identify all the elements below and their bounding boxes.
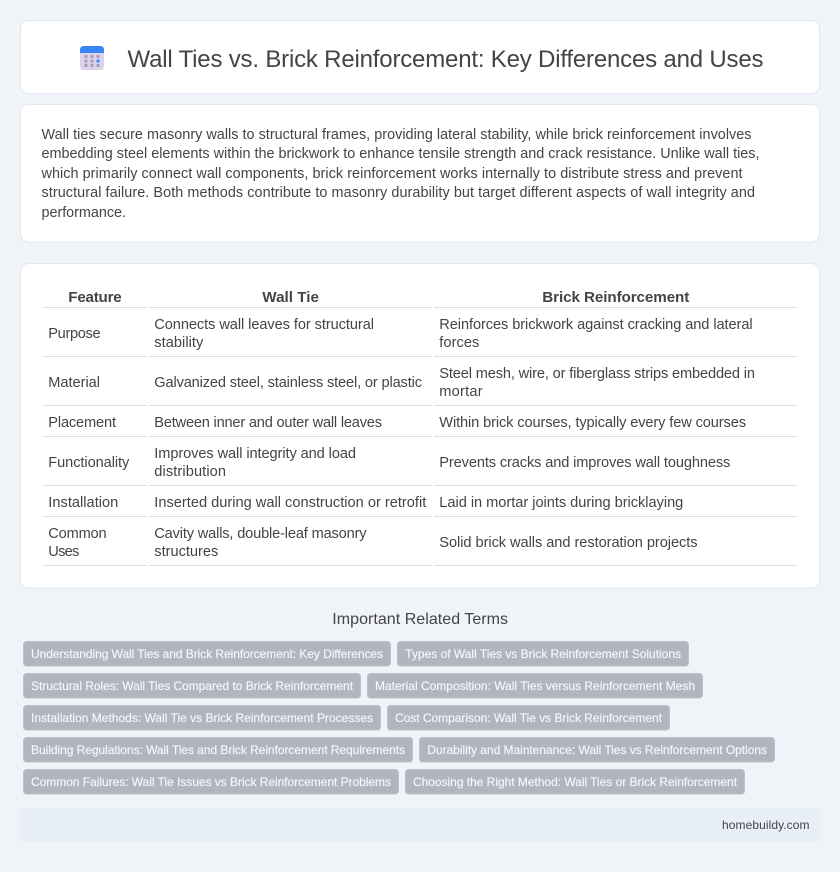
row: common uses: Solid brick walls and restoration projects	[439, 535, 698, 551]
title: Wall Ties vs. Brick Reinforcement: Key Differences and Uses	[128, 46, 764, 73]
related term tags	[24, 642, 774, 794]
tag: choosing method: Choosing the Right Method: Wall Ties or Brick Reinforcement	[413, 775, 738, 789]
panel: intro text	[20, 104, 820, 242]
row: material: mortar	[439, 384, 483, 400]
intro paragraph	[40, 127, 760, 221]
tag: durability	[420, 738, 774, 762]
row: functionality: Improves wall integrity and load	[154, 446, 356, 462]
panel: comparison table	[20, 264, 820, 588]
table header row: Wall Tie	[262, 289, 319, 306]
table header row: Feature	[68, 289, 122, 306]
row: purpose: Purpose	[48, 326, 101, 342]
row: common uses: Common	[48, 526, 107, 542]
panel: header	[20, 20, 820, 94]
row: material: Material	[48, 375, 100, 391]
row: placement	[48, 415, 746, 431]
tag: structural roles: Structural Roles: Wall Ties Compared to Brick Reinforcement	[31, 679, 354, 693]
row: installation: Installation	[48, 495, 118, 511]
tag: installation methods: Installation Methods: Wall Tie vs Brick Reinforcement Processes	[31, 711, 373, 725]
tag: structural roles	[24, 674, 360, 698]
tag: common failures	[24, 770, 398, 794]
row: functionality: distribution	[154, 464, 226, 480]
row: purpose	[48, 317, 753, 351]
row: installation: Laid in mortar joints during bricklaying	[439, 495, 683, 511]
table rules	[43, 307, 797, 566]
table header row	[68, 289, 689, 306]
row: material	[48, 366, 755, 400]
tag: cost comparison: Cost Comparison: Wall Tie vs Brick Reinforcement	[395, 711, 663, 725]
tag: common failures: Common Failures: Wall Tie Issues vs Brick Reinforcement Problems	[31, 775, 391, 789]
footer	[20, 808, 820, 842]
intro paragraph: embedding steel elements within the brickwork to enhance tensile strength and crack resistance. Unlike wall ties,	[42, 146, 760, 162]
intro paragraph: which primarily connect wall components, brick reinforcement works internally to distribute stress and prevent	[40, 166, 742, 182]
intro paragraph: structural failure. Both methods contribute to masonry durability but target different aspects of wall integrity and	[42, 185, 755, 201]
icon: calendar	[80, 46, 104, 70]
row: placement: Placement	[48, 415, 116, 431]
tag: building regulations: Building Regulations: Wall Ties and Brick Reinforcement Requirements	[31, 743, 405, 757]
heading: important related terms: Important Related Terms	[332, 611, 508, 628]
row: purpose: Reinforces brickwork against cracking and lateral	[439, 317, 753, 333]
row: installation	[48, 495, 683, 511]
table header row: Brick Reinforcement	[542, 289, 689, 306]
tag: understanding: Understanding Wall Ties and Brick Reinforcement: Key Differences	[31, 647, 383, 661]
row: functionality	[48, 446, 730, 480]
row: purpose: Connects wall leaves for structural	[154, 317, 374, 333]
row: purpose: stability	[154, 335, 204, 351]
intro paragraph: performance.	[42, 205, 126, 221]
tag: material composition: Material Composition: Wall Ties versus Reinforcement Mesh	[375, 679, 695, 693]
intro paragraph: Wall ties secure masonry walls to structural frames, providing lateral stability, while brick reinforcement involves	[42, 127, 752, 143]
row: functionality: Prevents cracks and improves wall toughness	[439, 455, 730, 471]
row: functionality: Functionality	[48, 455, 130, 471]
tag: understanding	[24, 642, 390, 666]
tag: types: Types of Wall Ties vs Brick Reinforcement Solutions	[405, 647, 681, 661]
row: common uses: Uses	[48, 544, 79, 560]
tag: types	[398, 642, 688, 666]
footer site name: homebuildy.com	[722, 818, 810, 832]
row: common uses	[48, 526, 698, 560]
row: installation: Inserted during wall construction or retrofit	[154, 495, 426, 511]
tag: cost comparison	[388, 706, 670, 730]
row: common uses: structures	[154, 544, 218, 560]
tag: installation methods	[24, 706, 380, 730]
tag: material composition	[368, 674, 702, 698]
row: placement: Between inner and outer wall leaves	[154, 415, 382, 431]
row: material: Steel mesh, wire, or fiberglass strips embedded in	[439, 366, 755, 382]
row: placement: Within brick courses, typically every few courses	[439, 415, 746, 431]
row: common uses: Cavity walls, double-leaf masonry	[154, 526, 367, 542]
row: purpose: forces	[439, 335, 479, 351]
tag: durability: Durability and Maintenance: Wall Ties vs Reinforcement Options	[427, 743, 767, 757]
tag: building regulations	[24, 738, 412, 762]
row: material: Galvanized steel, stainless steel, or plastic	[154, 375, 422, 391]
tag: choosing method	[406, 770, 744, 794]
